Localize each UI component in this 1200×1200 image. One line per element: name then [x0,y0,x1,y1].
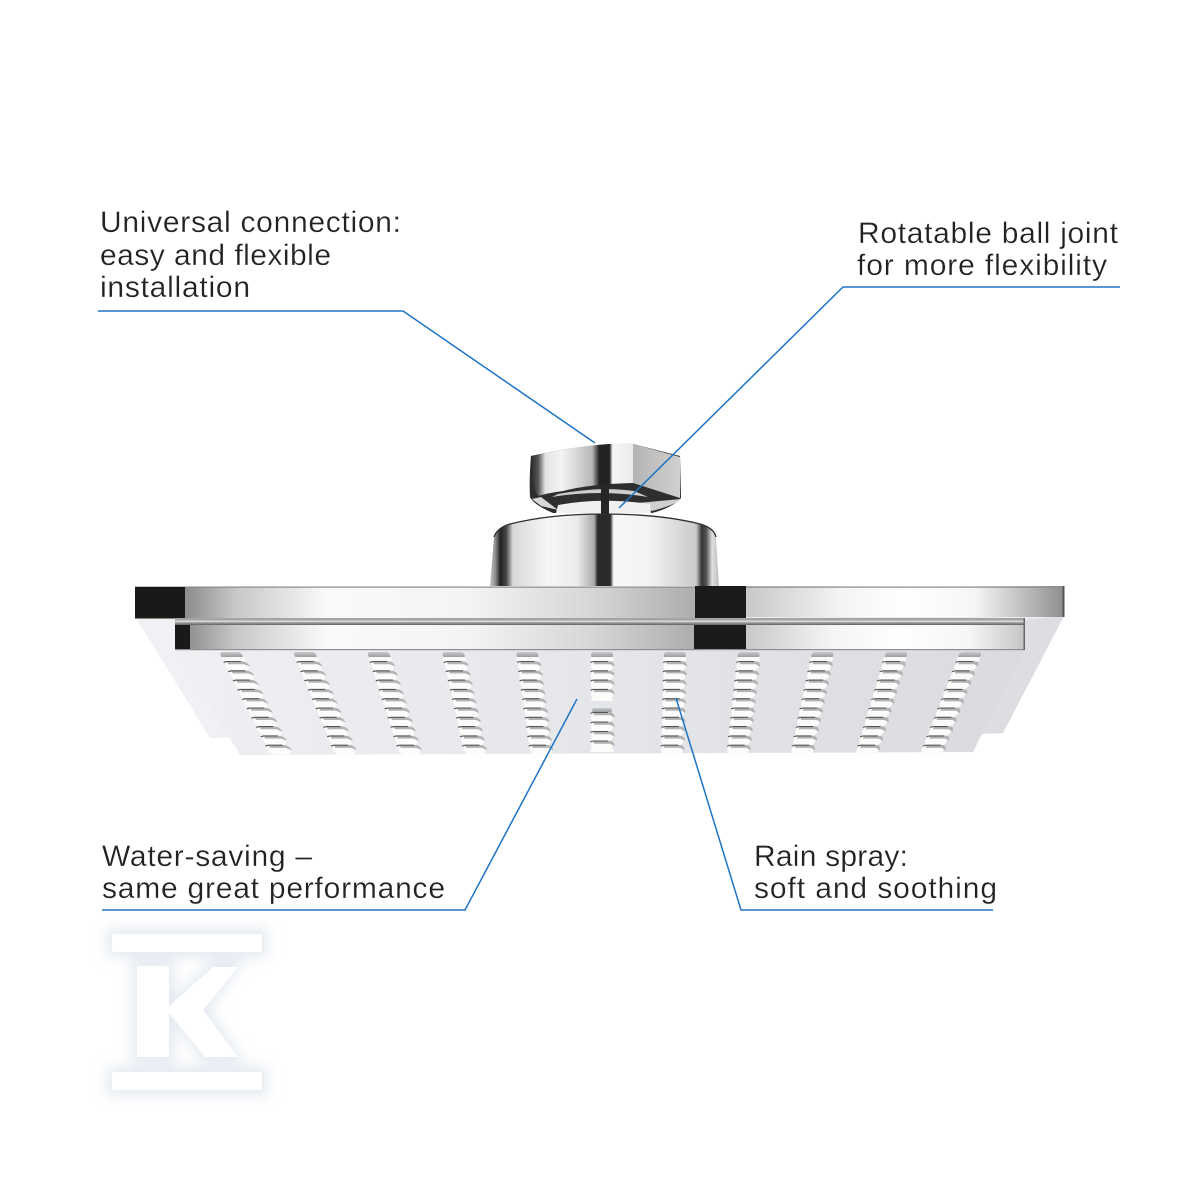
shower head illustration [135,443,1064,755]
upper chrome bar [135,586,1064,618]
callout: rotatable ball joint [619,217,1120,508]
nozzle row 1 [218,652,294,754]
bell top edge [494,514,716,537]
callout: rain spray: soft and soothing [754,872,997,905]
nozzle row 5 [516,652,554,754]
nozzle row 9 [790,652,836,754]
callout: universal connection [98,206,595,443]
callout: water-saving: same great performance [102,872,445,905]
lower chrome bar [175,618,1025,650]
face plate [175,648,1025,755]
callout: rain spray [676,698,997,910]
callout: universal connection: easy and flexible [100,239,331,272]
nozzle row 6 [590,652,614,752]
nozzle row 4 [442,652,488,754]
swivel nut [530,443,681,515]
callout: water-saving: Water-saving – [102,840,312,873]
back plate [136,616,1064,737]
nozzle row 11 [920,652,984,754]
spray nozzles [218,652,984,754]
callout: universal connection: Universal connection: [100,206,401,239]
mounting bell [490,514,719,586]
nozzle row 2 [292,652,359,754]
callout: rotatable ball joint: Rotatable ball joint [858,217,1119,250]
callout: rain spray: Rain spray: [754,840,908,873]
right back plate side [982,616,1064,734]
left back plate side [136,618,250,738]
watermark logo [106,928,268,1096]
nozzle row 3 [366,652,423,754]
callout: universal connection: installation [100,271,250,304]
nozzle row 8 [726,652,762,754]
callout: water-saving [102,699,577,910]
nozzle row 10 [855,652,910,754]
nozzle row 7 [660,652,688,754]
callout: rotatable ball joint: for more flexibility [857,249,1107,282]
